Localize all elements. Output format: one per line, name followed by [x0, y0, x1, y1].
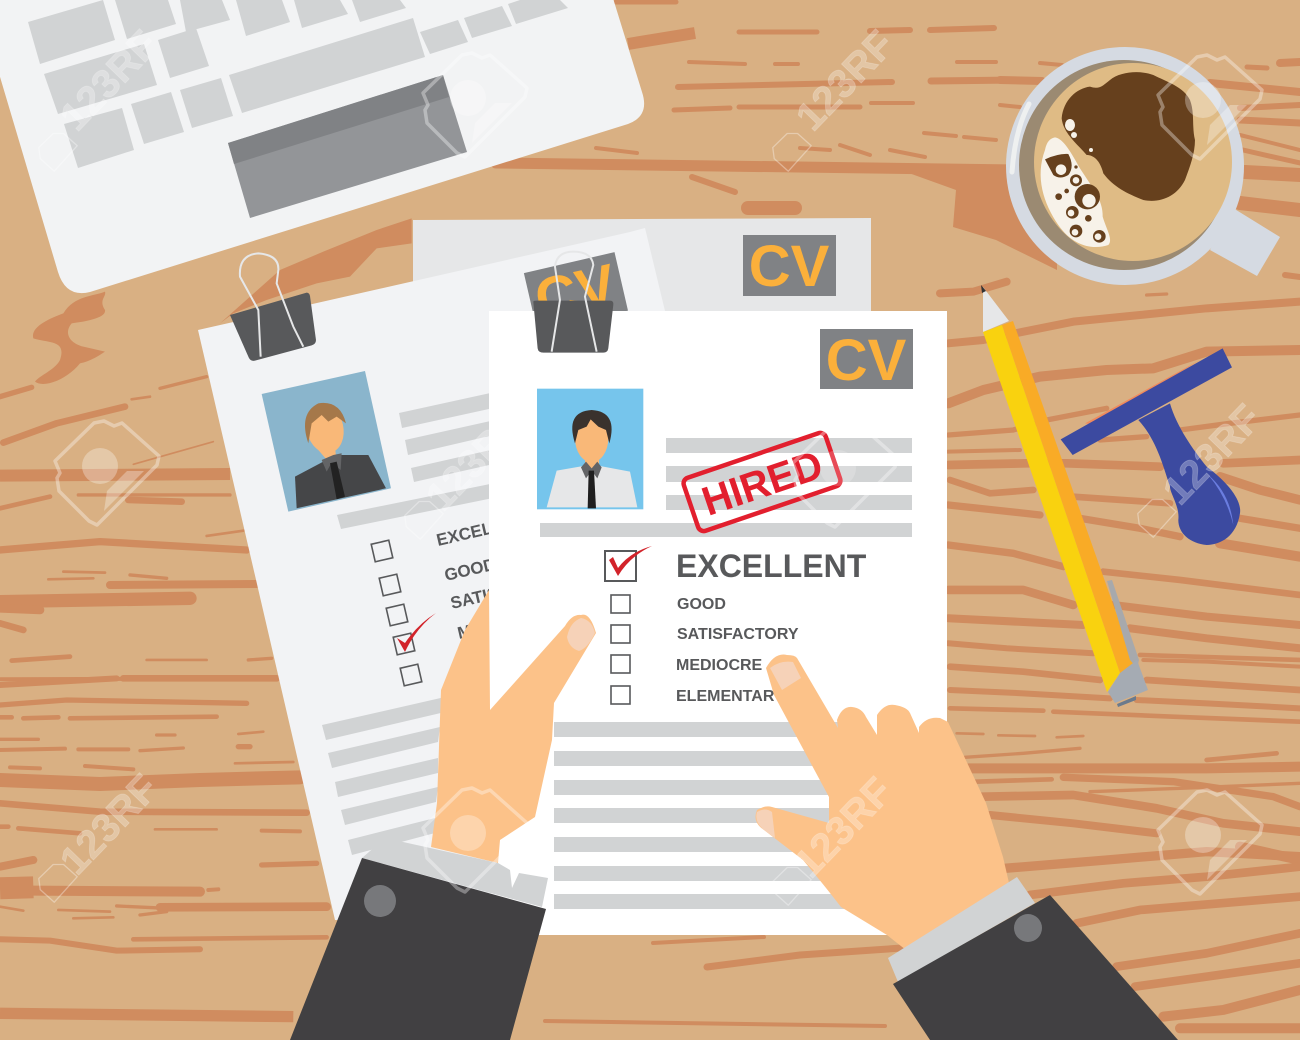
photo middle candidate	[262, 371, 391, 512]
rating list front: GOOD	[677, 596, 726, 613]
stock photo watermark text	[52, 22, 1270, 886]
fingernail index	[770, 662, 801, 690]
back CV sheet	[413, 218, 871, 320]
right shirt cuff	[888, 877, 1035, 982]
rating list front: ELEMENTARY	[676, 688, 785, 705]
CV badge back: CV	[749, 234, 830, 299]
rating list middle: EXCELLENT	[435, 509, 538, 550]
rating list middle	[435, 509, 579, 643]
CV badge front: CV	[826, 328, 907, 393]
front CV sheet	[489, 311, 947, 935]
coffee cup	[1006, 47, 1280, 285]
middle CV sheet	[198, 228, 672, 930]
left hand	[431, 590, 596, 863]
stock photo watermark text: 123RF	[418, 402, 533, 519]
info bars middle	[322, 392, 498, 855]
trackpad	[228, 75, 467, 218]
fingernail thumb	[756, 810, 775, 838]
stock photo watermark text: 123RF	[52, 22, 167, 139]
coffee foam	[1041, 137, 1110, 247]
check boxes middle	[371, 540, 422, 686]
right hand	[756, 655, 1009, 950]
stock photo watermark text: 123RF	[788, 22, 903, 139]
rating list front: SATISFACTORY	[677, 626, 799, 643]
left shirt cuff	[362, 838, 548, 907]
laptop	[0, 0, 644, 293]
rubber stamp	[1061, 348, 1240, 545]
rating list middle: GOOD	[443, 555, 498, 585]
watermark egg icons	[39, 53, 1262, 905]
HIRED stamp: HIRED	[696, 441, 828, 525]
right jacket sleeve	[893, 895, 1178, 1040]
dark coffee	[1062, 72, 1195, 201]
stock photo watermark text: 123RF	[1155, 396, 1270, 513]
CV badge middle: CV	[529, 252, 622, 333]
info bars front	[540, 438, 912, 909]
binder clip middle	[230, 253, 316, 361]
red tick front	[609, 546, 652, 576]
rating list front	[676, 548, 867, 705]
stock photo watermark text: 123RF	[786, 769, 901, 886]
rating list middle: SATISFACTORY	[449, 565, 579, 613]
rating list front: EXCELLENT	[676, 548, 867, 584]
binder clip front	[533, 252, 613, 353]
pencil	[981, 285, 1148, 707]
left jacket sleeve	[290, 858, 546, 1040]
red tick middle	[397, 613, 436, 652]
photo front candidate	[537, 389, 643, 509]
keyboard keys	[28, 0, 568, 168]
rating list front: MEDIOCRE	[676, 657, 763, 674]
stock photo watermark text: 123RF	[52, 766, 167, 883]
thumbnail left	[567, 618, 595, 651]
check boxes front	[605, 551, 636, 704]
rating list middle: MEDIOCRE	[456, 604, 549, 643]
